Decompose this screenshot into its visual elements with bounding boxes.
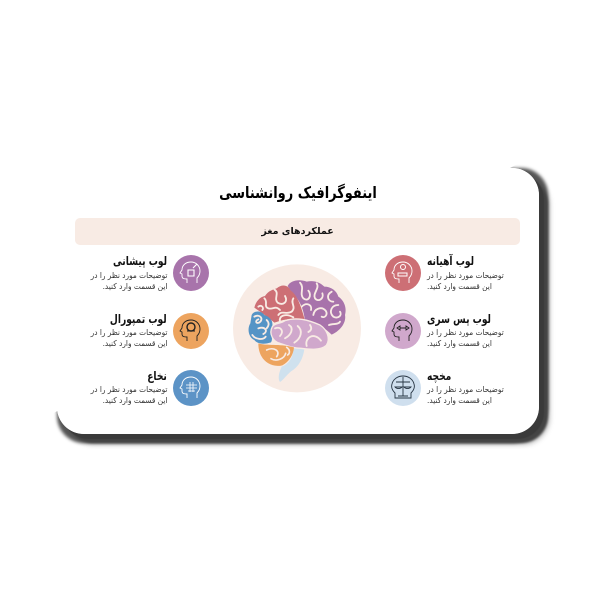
description: frontal lobe: [90, 271, 168, 291]
card shadow: [57, 168, 539, 434]
description: frontal lobe: توضیحات مورد نظر را در: [90, 271, 167, 280]
description: frontal lobe: این قسمت وارد کنید.: [102, 282, 167, 291]
heading: cerebellum: مخچه: [427, 369, 451, 383]
description: occipital lobe: این قسمت وارد کنید.: [427, 339, 492, 348]
item: cerebellum: [426, 369, 504, 405]
item: temporal lobe: [90, 312, 168, 348]
description: occipital lobe: توضیحات مورد نظر را در: [427, 328, 504, 337]
heading: temporal lobe: لوب تمپورال: [110, 312, 167, 326]
pink lobe: [271, 319, 328, 349]
description: cerebellum: [426, 385, 504, 405]
item: frontal lobe: [90, 254, 168, 291]
light blue brainstem: [279, 347, 304, 382]
description: temporal lobe: این قسمت وارد کنید.: [102, 339, 167, 348]
icon: temporal lobe head: [173, 313, 209, 349]
icon: medulla head: [173, 370, 209, 406]
description: medulla: [90, 385, 168, 405]
description: medulla: این قسمت وارد کنید.: [102, 396, 167, 405]
heading: frontal lobe: لوب پیشانی: [113, 254, 167, 268]
subtitle banner: [75, 218, 520, 245]
description: parietal lobe: این قسمت وارد کنید.: [427, 282, 492, 291]
icon: frontal lobe head: [173, 255, 209, 291]
description: temporal lobe: [90, 328, 168, 348]
panel: white card: [57, 168, 539, 434]
subtitle banner: عملکردهای مغز: [261, 226, 334, 237]
blue lobe: [249, 311, 272, 344]
description: parietal lobe: توضیحات مورد نظر را در: [427, 271, 504, 280]
title: اینفوگرافیک روانشناسی: [219, 183, 377, 202]
heading: occipital lobe: لوب پس سری: [427, 312, 491, 326]
heading: parietal lobe: لوب آهیانه: [427, 254, 474, 268]
item: parietal lobe: [426, 254, 504, 291]
description: cerebellum: توضیحات مورد نظر را در: [427, 385, 504, 394]
heading: medulla: نخاع: [147, 369, 167, 383]
description: medulla: توضیحات مورد نظر را در: [90, 385, 167, 394]
item: medulla: [90, 369, 168, 405]
brain illustration: [233, 264, 361, 392]
icon: parietal lobe head: [385, 255, 421, 291]
icon: cerebellum head: [385, 370, 421, 406]
red lobe: [254, 286, 305, 323]
purple lobe: [288, 280, 346, 335]
description: parietal lobe: [426, 271, 504, 291]
orange lobe: [258, 343, 294, 366]
description: cerebellum: این قسمت وارد کنید.: [427, 396, 492, 405]
background circle: [233, 264, 361, 392]
item: occipital lobe: [426, 312, 504, 348]
icon: occipital lobe head: [385, 313, 421, 349]
description: occipital lobe: [426, 328, 504, 348]
description: temporal lobe: توضیحات مورد نظر را در: [90, 328, 167, 337]
